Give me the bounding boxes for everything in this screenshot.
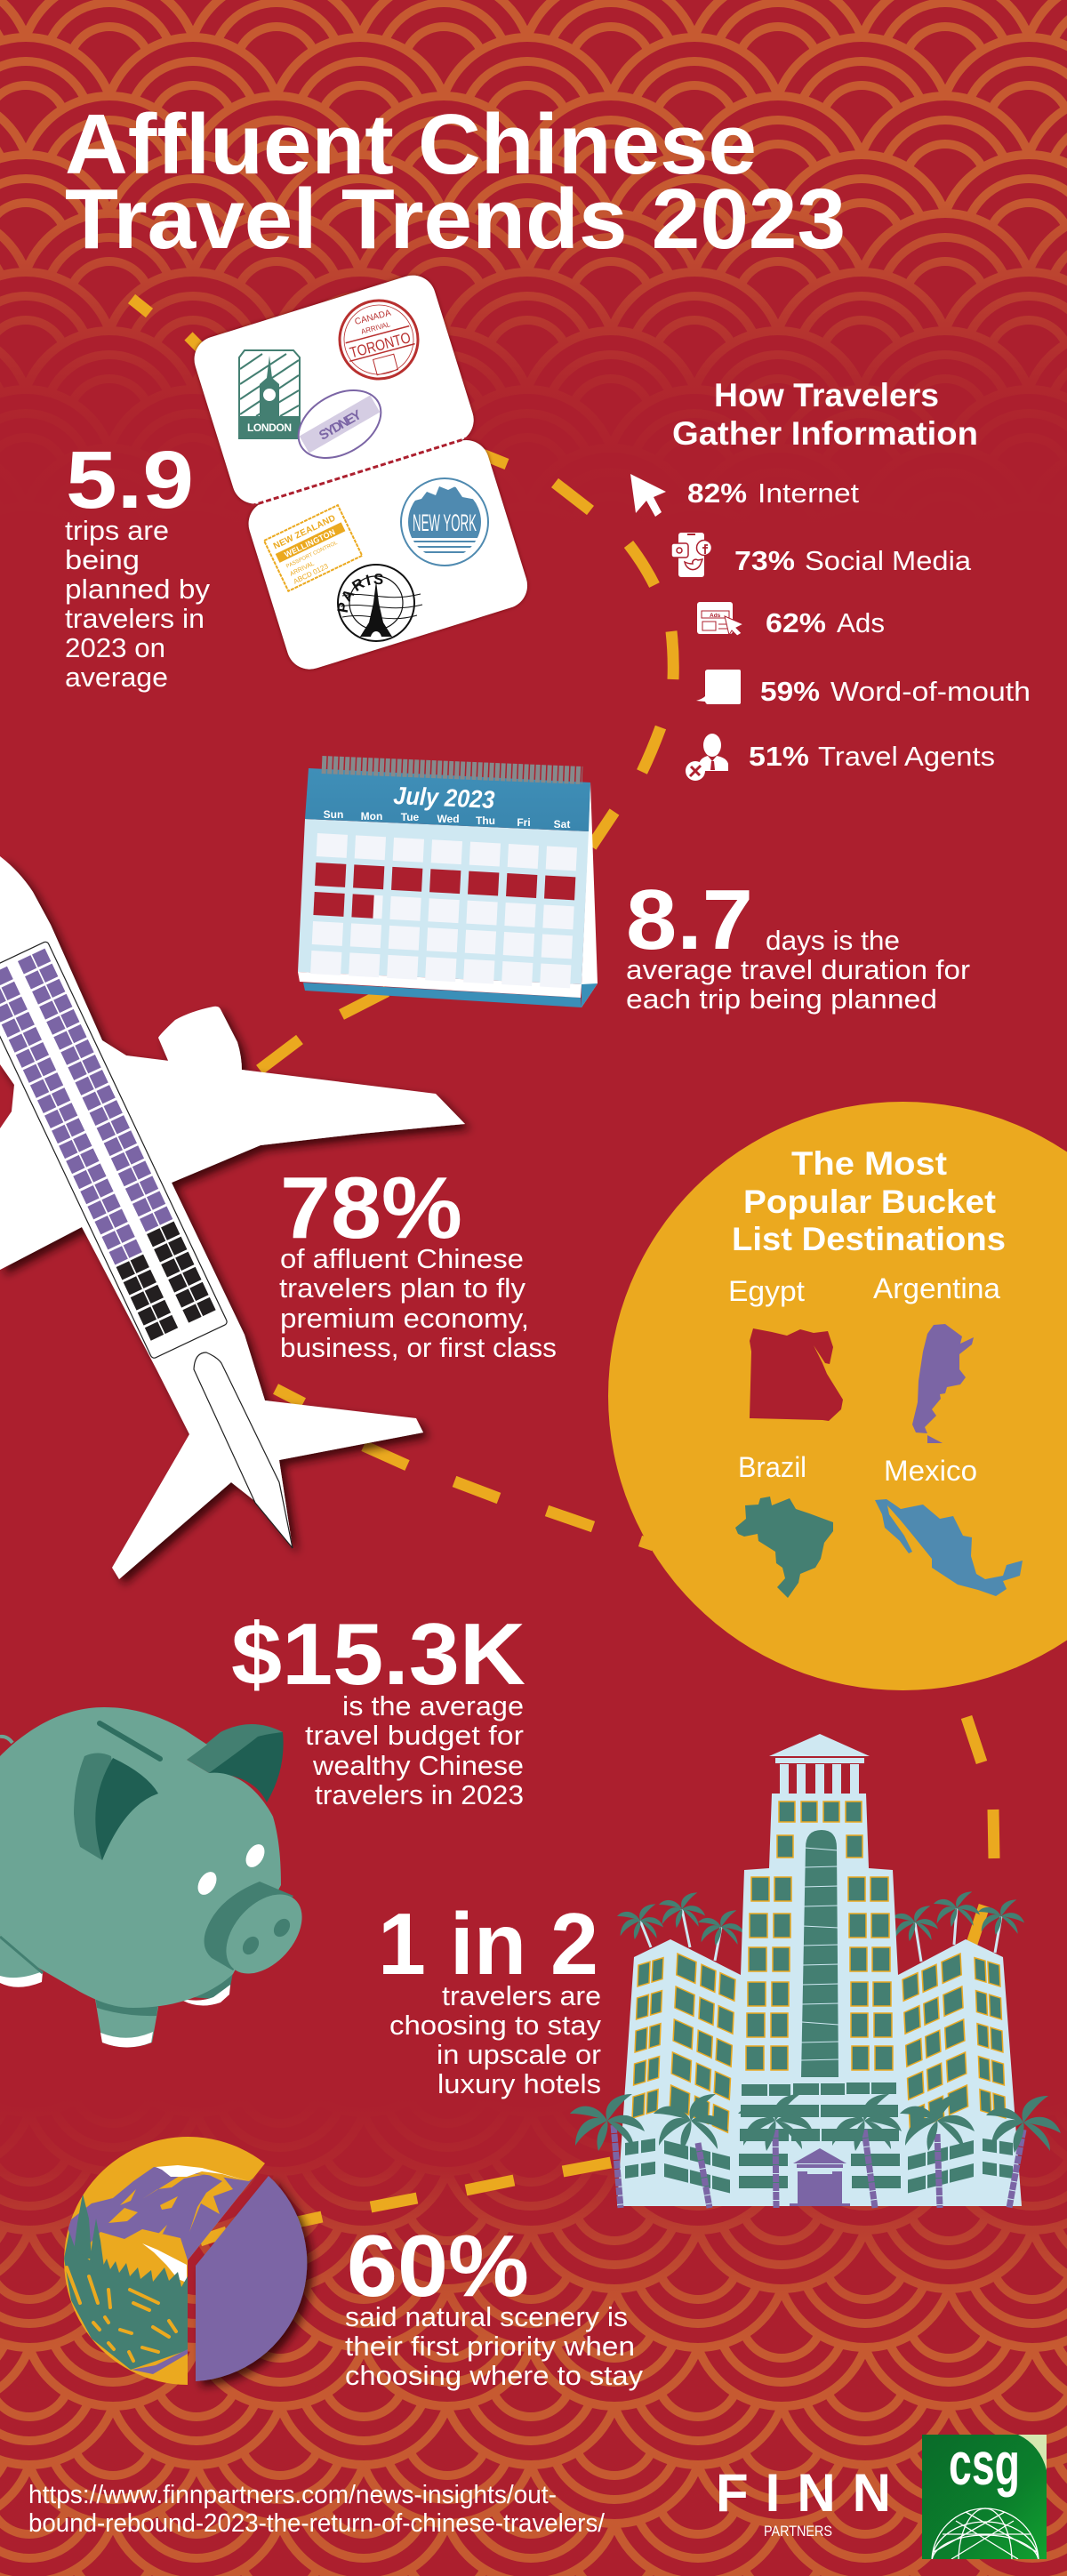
stat: 60% <box>345 2217 644 2391</box>
stat: 60%: their first priority when <box>345 2331 635 2362</box>
near ear <box>74 1753 120 1860</box>
item: ads <box>766 607 885 638</box>
stat: $15.3K: wealthy Chinese <box>312 1750 524 1781</box>
central arched window <box>801 1830 838 2077</box>
eyes <box>242 1841 269 1871</box>
calendar: July 2023 <box>393 782 495 814</box>
lower floor windows <box>739 2082 901 2188</box>
stat: $15.3K <box>231 1605 525 1810</box>
stat: 8.7 days: days is the <box>766 925 900 956</box>
hotel <box>570 1734 1061 2208</box>
stat: 5.9 trips: trips are <box>65 515 169 546</box>
stat: 1 in 2 <box>378 1895 602 2099</box>
mountain sunlit patches <box>108 2173 233 2235</box>
mountain <box>67 2167 265 2263</box>
item: ads: Ads <box>837 607 885 638</box>
stat: 1 in 2: travelers are <box>442 1980 601 2011</box>
destination: Mexico: Mexico <box>884 1455 977 1487</box>
heading: how travelers gather information: How Travelers <box>714 377 939 413</box>
stat: 60%: 60% <box>347 2217 529 2315</box>
item: travel agents: Travel Agents <box>818 741 995 772</box>
stat: 5.9 trips: 5.9 <box>66 435 194 526</box>
scenery pie chart <box>62 2134 307 2387</box>
stat: 8.7 days: 8.7 <box>626 872 753 967</box>
stat: 5.9 trips: being <box>65 544 140 575</box>
heading: how travelers gather information: Gather Information <box>672 415 978 452</box>
far ear <box>187 1724 283 1773</box>
stat: $15.3K: is the average <box>342 1690 524 1721</box>
icon: ads browser: Ads <box>710 613 721 619</box>
bucket list heading: List Destinations <box>732 1221 1006 1257</box>
tower windows <box>746 1802 893 2070</box>
stat: 1 in 2: choosing to stay <box>389 2010 602 2041</box>
stat: $15.3K: $15.3K <box>231 1605 525 1703</box>
destination: Brazil: Brazil <box>738 1451 806 1483</box>
mountain snow <box>142 2165 249 2283</box>
item: social media: Social Media <box>805 545 972 576</box>
left wing windows <box>625 1954 735 2193</box>
front palm trunks <box>614 2125 1023 2208</box>
stamp: New Zealand <box>264 505 362 591</box>
calendar <box>298 765 598 1007</box>
purple slice <box>196 2176 307 2381</box>
logo: Finn Partners: FINN <box>716 2463 891 2523</box>
plane body and wings <box>0 856 465 1579</box>
stat: $15.3K: travelers in 2023 <box>315 1779 524 1810</box>
bucket list heading: Popular Bucket <box>743 1184 996 1220</box>
logo: CSG <box>922 2435 1047 2559</box>
hotel roof and columns <box>769 1734 870 1794</box>
tail fin <box>194 1352 293 1548</box>
airplane <box>0 856 465 1579</box>
calendar: Tue <box>401 811 420 823</box>
engine <box>158 1007 242 1071</box>
top scale pattern <box>0 0 1067 542</box>
destination: Egypt <box>728 1275 843 1421</box>
passport pages <box>189 269 534 675</box>
arched window mullions <box>801 1848 839 2060</box>
item: ads: 62% <box>766 607 826 638</box>
right wing windows <box>903 1954 1013 2193</box>
snout <box>205 1882 293 1970</box>
stat: 5.9 trips: planned by <box>65 574 211 605</box>
bucket list heading <box>732 1145 1006 1257</box>
calendar date cells <box>310 833 577 988</box>
source url <box>28 2481 606 2538</box>
calendar: Thu <box>476 815 495 827</box>
icon: cursor <box>630 474 666 517</box>
stat: $15.3K: travel budget for <box>305 1720 524 1751</box>
destination: Mexico <box>875 1455 1023 1596</box>
stamp: London <box>239 350 300 438</box>
title: Travel Trends 2023 <box>65 172 846 267</box>
stamp: New Zealand: NEW ZEALAND <box>272 513 337 551</box>
source url: https://www.finnpartners.com/news-insights/out- <box>28 2481 557 2509</box>
item: travel agents <box>749 741 995 772</box>
stat: 78%: of affluent Chinese <box>280 1243 524 1274</box>
stat: 8.7 days: each trip being planned <box>626 983 937 1015</box>
stamp: Sydney: SYDNEY <box>317 407 365 444</box>
calendar: Fri <box>517 816 531 829</box>
calendar: Sat <box>554 818 570 831</box>
calendar: Wed <box>437 813 460 825</box>
item: internet: Internet <box>758 477 859 509</box>
tail <box>0 1737 12 1743</box>
pig body <box>0 1707 281 2008</box>
passport with stamps <box>192 274 530 671</box>
stamp: Toronto: ARRIVAL <box>360 320 391 336</box>
stat: 5.9 trips: average <box>65 662 168 693</box>
destination: Argentina <box>873 1272 1000 1443</box>
stamp: New Zealand: ABCD 0123 <box>293 562 330 586</box>
item: word of mouth: 59% <box>760 676 820 707</box>
item: word of mouth <box>760 676 1031 707</box>
stat: 1 in 2: in upscale or <box>437 2039 601 2070</box>
grass highlights <box>67 2267 176 2361</box>
stat: 60%: said natural scenery is <box>345 2301 628 2332</box>
stamp: New York: NEW YORK <box>413 510 477 536</box>
icon: speech bubble <box>696 670 741 704</box>
stat: 5.9 trips <box>65 435 211 693</box>
stat: 1 in 2: 1 in 2 <box>378 1895 598 1993</box>
passport fold stitching <box>251 437 469 506</box>
icon: social phone <box>671 533 711 577</box>
heading: how travelers gather information <box>672 377 978 452</box>
stamp: Toronto <box>331 292 427 388</box>
stamp: New York <box>401 478 488 566</box>
stat: 5.9 trips: travelers in <box>65 603 205 634</box>
bucket list heading: The Most <box>791 1145 947 1182</box>
stamp: Paris: PARIS <box>337 574 382 613</box>
stat: 5.9 trips: 2023 on <box>65 632 165 663</box>
coin slot <box>100 1723 160 1759</box>
panel: bucket list destinations <box>608 1102 1067 1690</box>
stamp: New Zealand: WELLINGTON <box>283 527 336 559</box>
stat: 8.7 days: average travel duration for <box>626 954 970 985</box>
foreground ground <box>132 2349 188 2374</box>
front palm leaves <box>570 2094 1061 2153</box>
destination: Egypt: Egypt <box>728 1275 805 1307</box>
stat: 78%: 78% <box>280 1159 462 1256</box>
destination: Brazil <box>735 1451 833 1598</box>
rooftop palms <box>617 1891 1024 1962</box>
stamp: New Zealand: PASSPORT CONTROL <box>285 541 339 570</box>
stamp: Toronto: TORONTO <box>348 329 413 362</box>
yellow circle <box>608 1102 1067 1690</box>
stamp: Paris <box>337 564 423 642</box>
stat: 8.7 days <box>626 872 970 1015</box>
dashed travel route <box>132 299 994 2241</box>
icon: travel agent <box>686 734 728 781</box>
stamp: New Zealand: ARRIVAL <box>289 560 316 578</box>
source url: bound-rebound-2023-the-return-of-chinese-travelers/ <box>28 2509 606 2538</box>
item: internet <box>687 477 859 509</box>
seat cabin <box>0 941 228 1360</box>
stat: 78%: travelers plan to fly <box>279 1272 526 1304</box>
destination: Argentina: Argentina <box>873 1272 1000 1304</box>
stat: 78% <box>279 1159 557 1363</box>
stat: 60%: choosing where to stay <box>345 2360 644 2391</box>
item: internet: 82% <box>687 477 747 509</box>
entrance portico <box>790 2148 850 2206</box>
item: social media: 73% <box>734 545 795 576</box>
stat: 1 in 2: luxury hotels <box>437 2068 601 2099</box>
hotel building <box>617 1794 1022 2206</box>
bottom scale pattern <box>0 2099 1067 2576</box>
stat: 78%: business, or first class <box>280 1332 557 1363</box>
stamp: Toronto: CANADA <box>354 309 392 327</box>
title: Affluent Chinese <box>65 97 757 192</box>
forest <box>64 2232 188 2370</box>
pine trees <box>73 2194 104 2267</box>
calendar: Sun <box>324 808 343 821</box>
piggy bank <box>0 1707 317 2047</box>
item: travel agents: 51% <box>749 741 809 772</box>
left leg seam <box>0 1937 43 1973</box>
item: word of mouth: Word-of-mouth <box>830 676 1031 707</box>
stamp: Sydney <box>286 376 393 472</box>
calendar: Mon <box>361 810 382 823</box>
title <box>65 97 846 267</box>
stamp: London: LONDON <box>247 421 292 434</box>
scenery slice <box>62 2134 276 2387</box>
item: social media <box>734 545 972 576</box>
stat: 78%: premium economy, <box>280 1303 529 1334</box>
logo: Finn Partners: PARTNERS <box>764 2523 832 2540</box>
pig feet <box>0 1934 233 2047</box>
logo: CSG: csg <box>949 2430 1020 2498</box>
icon: ads browser <box>697 602 743 636</box>
